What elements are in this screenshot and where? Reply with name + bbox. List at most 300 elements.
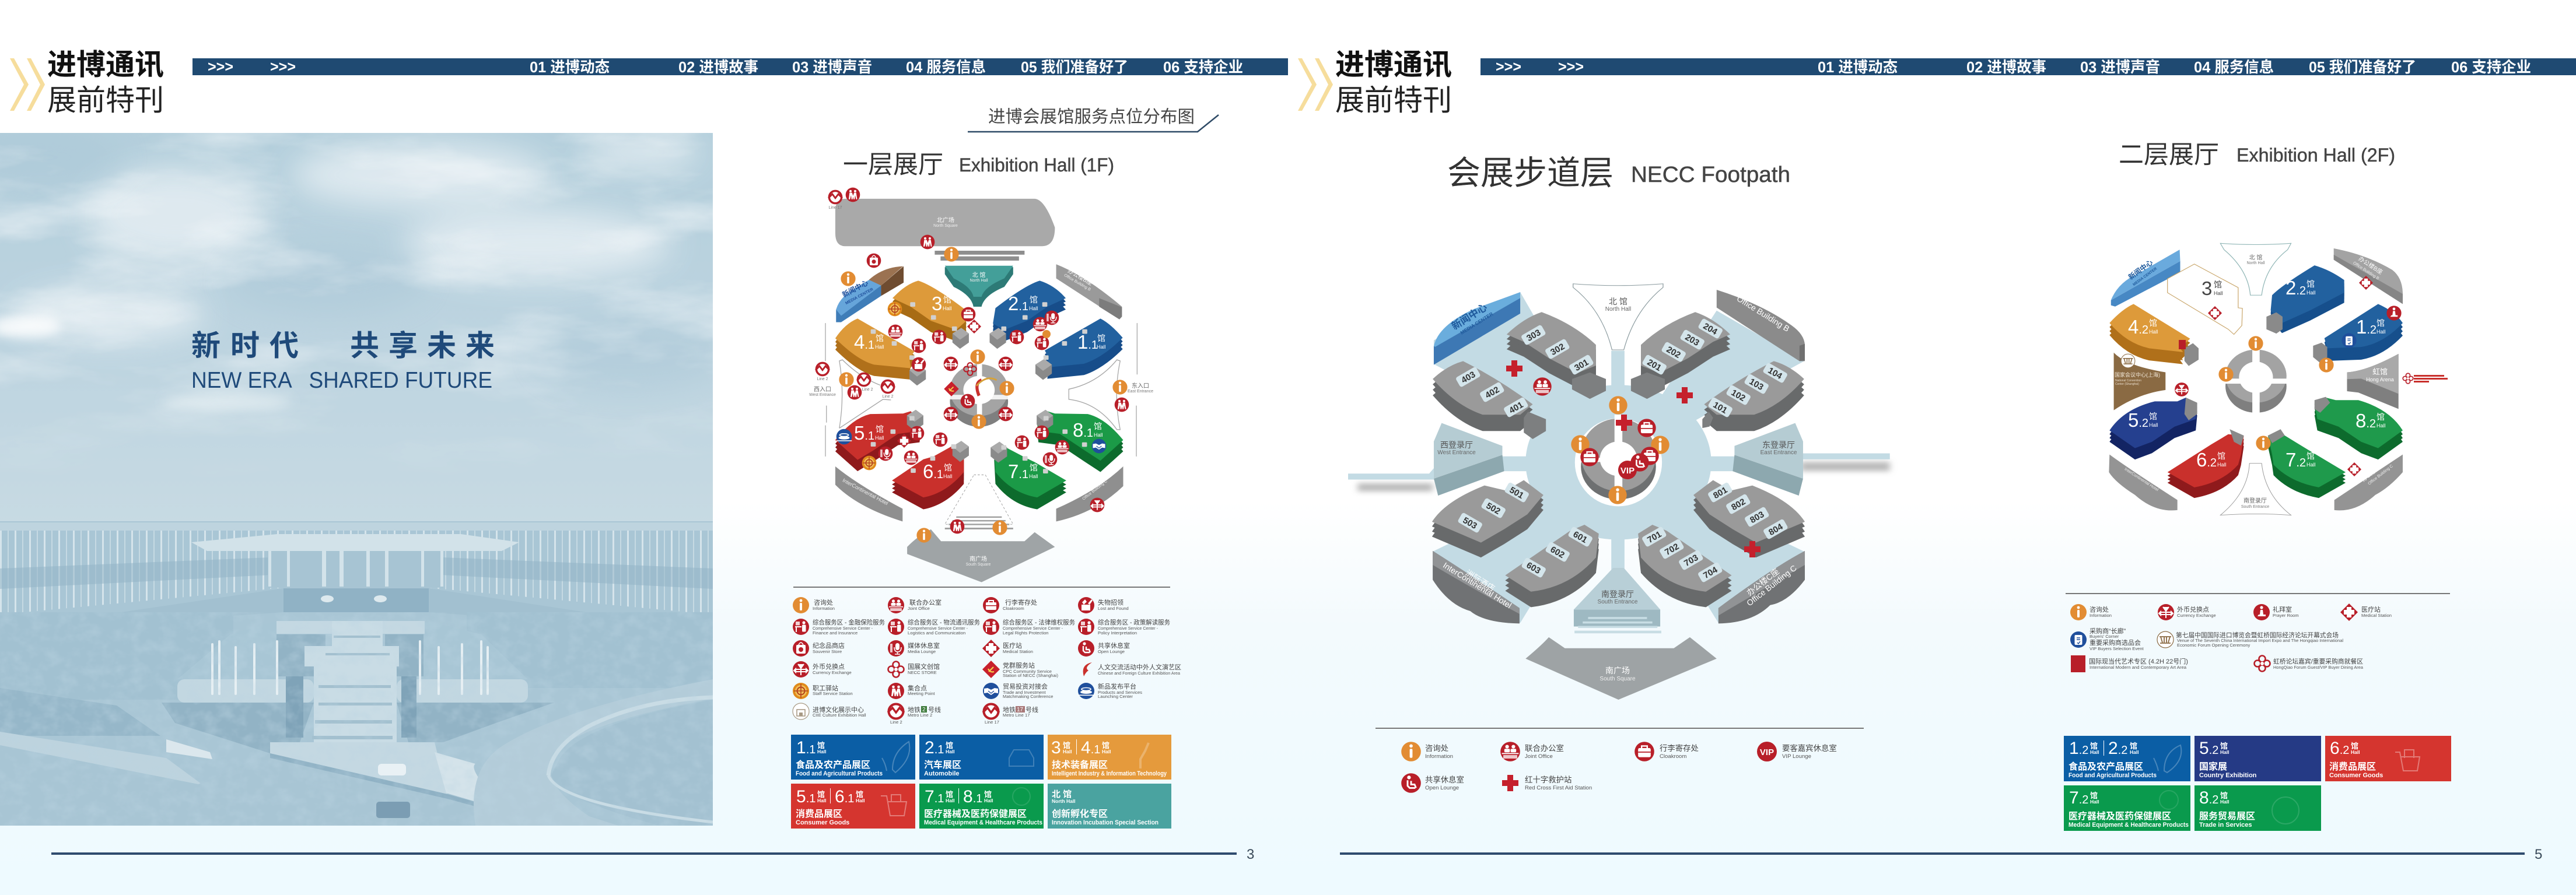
map labels: 1F places: Line 17 <box>829 206 842 210</box>
map labels: NECC room tags: 603 <box>1525 560 1542 576</box>
map labels: 2F hall numbers: 4.2 <box>2128 316 2148 338</box>
map labels: 1F places: 北广场 <box>937 216 954 224</box>
office building B <box>1717 290 1805 361</box>
legend row 4: CPC Community Service <box>1003 669 1052 674</box>
legend row: info, currency, prayer, medical: 外币兑换点 <box>2177 605 2209 613</box>
south steps and dashed forecourt <box>945 475 1013 529</box>
navigation bar: left page: 04 服务信息 <box>906 58 986 76</box>
legend row 6: 号线 <box>928 706 941 714</box>
legend row 3: Medical Station <box>1003 649 1033 654</box>
card: technology halls 3 and 4.1: Intelligent Industry & Information Technology <box>1052 770 1167 777</box>
legend row 1: Joint Office <box>908 606 930 611</box>
legend row 5: Matchmaking Conference <box>1003 694 1054 699</box>
north hall <box>945 266 1013 307</box>
legend row: art area and dining area: 虹桥论坛嘉宾/重要采购商就餐区 <box>2273 657 2363 665</box>
map labels: 2F hall numbers <box>2128 277 2386 471</box>
map labels: NECC places: 办公楼C座 <box>1745 566 1781 598</box>
card: medical halls 7.1 and 8.1: Hall <box>946 798 955 803</box>
map labels: 2F places: South Entrance <box>2241 505 2269 509</box>
card: medical halls 7.1 and 8.1: 馆 <box>984 790 992 799</box>
map labels: NECC room tags: 102 <box>1730 388 1747 403</box>
legend row 6: 进博文化展示中心 <box>813 706 864 714</box>
card: trade in services hall 8.2: 8.2 <box>2199 788 2218 808</box>
card: trade in services hall 8.2: 服务贸易展区 <box>2199 810 2255 822</box>
navigation bar: right page: 02 进博故事 <box>1966 58 2046 76</box>
card: medical hall 7.2: 医疗器械及医药保健展区 <box>2068 810 2171 822</box>
map labels: NECC room tags: 502 <box>1485 501 1502 517</box>
map labels: 1F hall numbers: 7.1 <box>1008 461 1028 482</box>
map labels: 2F hall numbers: 馆 <box>2214 280 2222 289</box>
legend row 5: 职工驿站 <box>813 684 838 692</box>
legend row 3: 纪念品商店 <box>813 641 845 650</box>
map labels: 2F places: 洲际酒店 <box>2132 462 2155 481</box>
office building C <box>1056 466 1123 521</box>
card: medical hall 7.2: 7.2 <box>2069 788 2088 808</box>
map labels: 1F hall numbers: 3 <box>932 293 942 314</box>
map labels: 1F hall numbers: 4.1 <box>854 331 874 353</box>
map labels: NECC room tags: 602 <box>1549 545 1566 560</box>
card: food halls 1.2 and 2.2 <box>2064 736 2190 781</box>
hall 3 <box>892 280 969 349</box>
legend row: art area and dining area: 国际现当代艺术专区 (4.2H 22号门) <box>2089 657 2188 665</box>
map labels: 1F places: Line 2 <box>882 395 894 399</box>
legend row 5: Trade and Investment <box>1003 690 1046 695</box>
legend row 1: 咨询处 <box>814 598 833 606</box>
legend row 4: NECC STORE <box>908 670 937 675</box>
legend item: information: 咨询处 <box>1425 744 1448 753</box>
legend row 5 <box>793 682 1142 699</box>
map labels: 1F places: Office Building B <box>1063 273 1091 292</box>
legend row: art area and dining area: International Modern and Contemporary Art Area <box>2090 665 2187 670</box>
navigation bar: left page: >>> <box>270 58 296 75</box>
map labels: NECC room tags <box>1455 318 1788 583</box>
map labels: 2F places: Hong Arena <box>2366 377 2394 382</box>
card: technology halls 3 and 4.1: Hall <box>1102 749 1111 754</box>
halls 701-704 <box>1638 525 1732 607</box>
map labels: 1F hall numbers: 馆 <box>943 295 951 304</box>
legend item: cloakroom: 行李寄存处 <box>1660 743 1699 753</box>
legend item: VIP lounge: VIP Lounge <box>1782 753 1811 760</box>
legend row: info, currency, prayer, medical: Medical Station <box>2361 613 2392 618</box>
map icons: NECC footpath service points <box>1506 360 1760 557</box>
card: country exhibition hall 5.2: Country Exhibition <box>2199 772 2257 779</box>
map labels: 2F hall numbers: 8.2 <box>2356 410 2376 431</box>
map labels: 1F places: West Entrance <box>809 393 836 397</box>
map labels: 1F hall numbers: 2.1 <box>1008 293 1028 314</box>
legend row 6: Line 17 <box>985 719 999 725</box>
card: innovation north hall: 创新孵化专区 <box>1052 808 1108 819</box>
navigation bar: right page <box>1480 58 2576 76</box>
legend item: open lounge: Open Lounge <box>1425 785 1459 791</box>
navigation bar: left page: 05 我们准备好了 <box>1021 58 1128 76</box>
map labels: 2F hall numbers: 馆 <box>2149 412 2157 421</box>
halls 601-603 <box>1505 525 1599 607</box>
card: consumer goods halls 5.1 and 6.1: 消费品展区 <box>796 809 842 819</box>
map labels: NECC places: 洲际酒店 <box>1464 568 1497 593</box>
media center <box>2111 250 2180 307</box>
map labels: 1F places: 北 馆 <box>972 271 985 279</box>
hall gate tags <box>871 302 1087 473</box>
hall 2.1 <box>990 280 1066 349</box>
map labels: 2F places: National Convention <box>2115 379 2141 382</box>
south square <box>907 529 1055 582</box>
card: automobile hall 2.1: 馆 <box>946 741 953 750</box>
map labels: NECC room tags: 503 <box>1461 515 1479 531</box>
map labels: NECC room tags: 101 <box>1712 400 1729 416</box>
legend item: VIP lounge <box>1757 742 1837 761</box>
map labels: NECC places: 东登录厅 <box>1762 440 1795 450</box>
slogan on photo: 新时代 <box>191 329 309 362</box>
hall 5.2 <box>2109 398 2197 459</box>
map labels: 1F hall numbers: 馆 <box>876 424 884 434</box>
halls 501-503 <box>1432 480 1544 557</box>
map labels: NECC places: 西登录厅 <box>1440 440 1473 450</box>
legend row 3: Media Lounge <box>908 649 936 654</box>
card: consumer goods hall 6.2: 6.2 <box>2330 739 2349 758</box>
legend row 6: Metro Line 2 <box>908 713 932 718</box>
legend row 6: 地铁 <box>908 706 921 714</box>
map labels: 1F places <box>809 206 1153 567</box>
card: food halls 1.2 and 2.2: 食品及农产品展区 <box>2068 761 2143 772</box>
map labels: NECC places: 南登录厅 <box>1601 589 1634 599</box>
map labels: NECC places: 北 馆 <box>1609 297 1628 306</box>
legend row 6: CIIE Culture Exhibition Hall <box>813 713 866 718</box>
map labels: 2F places: 办公楼B座 <box>2357 255 2384 276</box>
legend row 3: Souvenir Store <box>813 649 842 654</box>
card: consumer goods halls 5.1 and 6.1: 馆 <box>856 790 863 799</box>
map labels: NECC room tags: 801 <box>1712 485 1729 501</box>
map labels: 1F hall numbers: Hall <box>1094 432 1103 438</box>
card: technology halls 3 and 4.1: 3 <box>1051 738 1061 757</box>
legend item: joint office: Joint Office <box>1525 753 1553 760</box>
card: medical halls 7.1 and 8.1: Hall <box>984 798 993 803</box>
legend item: information: Information <box>1425 753 1453 760</box>
map icons: NECC footpath service points: VIP <box>1620 466 1634 476</box>
card: consumer goods hall 6.2: 馆 <box>2351 742 2358 750</box>
hall 7.1 <box>991 442 1066 510</box>
legend row 4: 外币兑换点 <box>813 662 845 671</box>
legend row: buyers corner and venue: Economic Forum Opening Ceremony <box>2177 643 2250 648</box>
legend item: red cross: 红十字救护站 <box>1525 775 1572 784</box>
card: food halls 1.2 and 2.2: 馆 <box>2130 742 2137 750</box>
navigation bar: left page: 02 进博故事 <box>678 58 758 76</box>
south entrance outline <box>2220 464 2291 515</box>
map labels: 2F hall numbers: 馆 <box>2306 451 2315 461</box>
map labels: 1F places: Office Building C <box>1082 479 1108 501</box>
card: food halls 1.2 and 2.2: Food and Agricultural Products <box>2068 772 2157 779</box>
card: medical hall 7.2: 馆 <box>2090 791 2098 800</box>
map labels: 1F hall numbers: 馆 <box>1094 422 1102 431</box>
map labels: 1F places: North Hall <box>970 279 988 283</box>
legend row: buyers corner and venue: Venue of The Seventh China International Import Expo and The Hongqiao International <box>2177 638 2343 643</box>
map labels: 2F places: Office Building C <box>2367 464 2394 486</box>
map labels: 2F places: Office Building B <box>2352 261 2380 281</box>
map labels: 2F hall numbers: 馆 <box>2376 318 2385 328</box>
slogan on photo: NEW ERA SHARED FUTURE <box>191 368 492 393</box>
map labels: 1F hall numbers: Hall <box>1029 473 1038 479</box>
map labels: 2F hall numbers: Hall <box>2376 423 2386 429</box>
navigation bar: right page: >>> <box>1558 58 1584 75</box>
map labels: 2F hall numbers: Hall <box>2149 329 2158 335</box>
card: automobile hall 2.1: 汽车展区 <box>924 759 961 770</box>
zone cards: 2F <box>2064 736 2451 831</box>
map labels: NECC room tags: 704 <box>1702 564 1720 581</box>
card: medical halls 7.1 and 8.1: 8.1 <box>963 787 982 806</box>
hall 6.2 <box>2168 429 2244 498</box>
west walkway with shadow <box>1348 468 1434 492</box>
card: consumer goods halls 5.1 and 6.1: Hall <box>817 798 827 803</box>
legend: NECC footpath <box>1376 728 1864 793</box>
map: NECC footpath shapes <box>1348 284 1890 700</box>
map labels: 1F hall numbers: 馆 <box>1030 295 1038 304</box>
hall 1.2 <box>2313 304 2403 363</box>
legend row: buyers corner and venue: 采购商“长廊” <box>2090 627 2126 635</box>
map labels: NECC places: 新闻中心 <box>1450 301 1489 332</box>
map labels: 2F hall numbers: 2.2 <box>2286 277 2306 299</box>
legend row 1: Information <box>813 606 835 611</box>
central rotunda <box>2224 348 2288 415</box>
legend row: buyers corner and venue: VIP Buyers Selection Event <box>2090 646 2144 651</box>
map labels: NECC places: South Entrance <box>1598 599 1638 605</box>
legend row 2: 综合服务区 - 法律维权服务 <box>1003 618 1075 626</box>
legend row: art area and dining area: HongQiao Forum Guest/VIP Buyer Dining Area <box>2273 665 2364 670</box>
map labels: 2F places <box>2115 254 2394 509</box>
map labels: 2F hall numbers: Hall <box>2306 462 2316 468</box>
map labels: 1F hall numbers: 馆 <box>876 334 884 343</box>
map labels: NECC places: InterContinental Hotel <box>1441 560 1513 610</box>
map labels: 2F places: 南登录厅 <box>2244 497 2267 504</box>
card: food halls 1.2 and 2.2: 2.2 <box>2108 739 2127 758</box>
card: technology halls 3 and 4.1 <box>1048 735 1171 780</box>
legend row: info, currency, prayer, medical: Prayer Room <box>2273 613 2299 618</box>
map labels: NECC room tags: 703 <box>1682 553 1700 568</box>
map labels: NECC room tags: 702 <box>1663 542 1681 557</box>
map labels: 1F places: 新闻中心 <box>841 278 870 299</box>
card: innovation north hall <box>1048 784 1171 829</box>
card: food halls 1.1: Hall <box>817 749 827 754</box>
map labels: NECC room tags: 204 <box>1702 321 1719 337</box>
hall 8.2 <box>2315 397 2403 459</box>
legend item: open lounge: 共享休息室 <box>1425 775 1464 784</box>
map labels: 1F places: Line 2 <box>862 388 873 392</box>
navigation bar: right page: 01 进博动态 <box>1818 58 1898 76</box>
legend row 1: Lost and Found <box>1098 606 1129 611</box>
map labels: NECC room tags: 302 <box>1549 342 1566 357</box>
legend row 2: Comprehensive Service Center - <box>1098 626 1158 631</box>
map icons: 2F service points <box>2121 276 2448 476</box>
legend row 2: Comprehensive Service Center - <box>1003 626 1063 631</box>
legend row 3: 医疗站 <box>1003 641 1022 650</box>
hall 3 outline <box>2168 264 2242 334</box>
navigation bar: right page: 03 进博声音 <box>2080 58 2160 76</box>
legend row 5: Meeting Point <box>908 691 935 696</box>
legend row 3 <box>793 640 1130 657</box>
card: consumer goods halls 5.1 and 6.1 <box>791 784 915 829</box>
map labels: 2F places: 北 馆 <box>2249 254 2262 261</box>
map labels: NECC room tags: 203 <box>1684 332 1701 348</box>
legend row 2: Logistics and Communication <box>908 630 965 636</box>
hotel <box>2109 454 2178 510</box>
heading: exhibition hall 1F: 一层展厅 <box>843 151 943 179</box>
legend row 4: 人文交流活动中外人文演艺区 <box>1098 663 1181 671</box>
card: automobile hall 2.1: 2.1 <box>925 738 944 757</box>
legend row 5: Products and Services <box>1098 690 1142 695</box>
heading: exhibition hall 1F <box>843 151 1114 179</box>
map labels: 2F hall numbers: 6.2 <box>2196 449 2217 471</box>
heading: NECC footpath: NECC Footpath <box>1631 163 1790 187</box>
legend row 5: Launching Center <box>1098 694 1133 699</box>
legend row: info, currency, prayer, medical <box>2070 603 2392 621</box>
map labels: 1F places: Line 2 <box>817 377 828 381</box>
south square <box>1525 637 1717 700</box>
card: technology halls 3 and 4.1: 4.1 <box>1081 738 1100 757</box>
map labels: 1F places: 办公楼C座 <box>1073 476 1100 499</box>
map labels: NECC room tags: 201 <box>1646 357 1663 373</box>
legend row 6: Line 2 <box>890 719 902 725</box>
map labels: NECC room tags: 403 <box>1460 370 1477 385</box>
card: consumer goods halls 5.1 and 6.1: 5.1 <box>796 787 816 806</box>
legend row 6 <box>793 703 1038 725</box>
map labels: NECC room tags: 601 <box>1572 529 1589 545</box>
map labels: 2F places: 新闻中心 <box>2127 258 2154 282</box>
hotel <box>835 466 902 521</box>
masthead: left page: 展前特刊 <box>47 84 164 117</box>
legend item: joint office <box>1500 742 1564 761</box>
map labels: NECC places: Office Building C <box>1745 563 1798 608</box>
photo panel: NECC exterior with slogan background <box>0 128 723 828</box>
legend row 5: 贸易投资对接会 <box>1003 682 1048 690</box>
map labels: 1F hall numbers: Hall <box>943 473 953 479</box>
navigation bar: left page: 03 进博声音 <box>792 58 872 76</box>
legend row 1: 失物招领 <box>1098 598 1124 606</box>
legend row: buyers corner and venue: Buyers' Corner <box>2090 634 2119 639</box>
map labels: 2F hall numbers: 馆 <box>2306 279 2315 289</box>
office building C <box>1718 551 1805 623</box>
map labels: NECC room tags: 402 <box>1483 385 1501 401</box>
map labels: 2F hall numbers: Hall <box>2376 329 2386 335</box>
map labels: 2F hall numbers: 5.2 <box>2128 409 2148 431</box>
card: medical halls 7.1 and 8.1 <box>919 784 1044 829</box>
navigation bar: right page: 04 服务信息 <box>2194 58 2274 76</box>
card: food halls 1.2 and 2.2: 1.2 <box>2069 739 2088 758</box>
map labels: 1F places: East Entrance <box>1128 389 1153 394</box>
legend row 1: 联合办公室 <box>909 598 942 606</box>
legend row 2: 综合服务区 - 金融保险服务 <box>813 618 885 626</box>
map labels: 1F hall numbers: 1.1 <box>1077 331 1098 353</box>
map labels: 1F places: 东入口 <box>1132 382 1149 389</box>
west entrance <box>1434 423 1504 496</box>
legend row 4: Station of NECC (Shanghai) <box>1003 673 1058 678</box>
map labels: 2F hall numbers: Hall <box>2149 422 2158 428</box>
legend row 2 <box>793 618 1170 636</box>
halls 401-403 <box>1433 361 1546 439</box>
card: medical halls 7.1 and 8.1: Medical Equipment & Healthcare Products <box>924 819 1042 826</box>
map labels: 2F hall numbers: 7.2 <box>2286 449 2306 471</box>
card: consumer goods halls 5.1 and 6.1: Hall <box>856 798 865 803</box>
map labels: NECC room tags: 301 <box>1573 357 1590 373</box>
navigation bar: left page: >>> <box>208 58 233 75</box>
inner court <box>1575 418 1662 506</box>
legend row 2: Legal Rights Protection <box>1003 630 1049 636</box>
legend row 2: 综合服务区 - 政策解读服务 <box>1098 618 1170 626</box>
card: technology halls 3 and 4.1: 馆 <box>1063 741 1070 750</box>
map: exhibition hall 2F shapes <box>2109 243 2403 515</box>
legend row 2: Policy Interpretation <box>1098 630 1137 636</box>
masthead: left page: 进博通讯 <box>47 48 164 81</box>
hall 1.1 <box>1035 318 1123 380</box>
map labels: 1F hall numbers: 8.1 <box>1073 419 1093 441</box>
card: food halls 1.2 and 2.2: Hall <box>2090 749 2099 755</box>
legend item: cloakroom <box>1634 742 1699 761</box>
heading: exhibition hall 2F: 二层展厅 <box>2119 141 2219 169</box>
halls 801-804 <box>1693 480 1805 557</box>
map labels: NECC room tags: 701 <box>1646 529 1663 545</box>
map labels: 1F hall numbers: Hall <box>1029 306 1038 311</box>
map labels: 2F hall numbers: Hall <box>2214 290 2223 296</box>
map labels: 2F hall numbers: 馆 <box>2217 451 2225 461</box>
card: medical hall 7.2: Medical Equipment & Healthcare Products <box>2068 822 2189 829</box>
map labels: 1F places: 派出所 <box>1103 285 1122 300</box>
hall 4.2 <box>2109 304 2199 366</box>
map labels: NECC places: Office Building B <box>1735 294 1791 334</box>
halls 101-104 <box>1702 361 1804 431</box>
card: medical hall 7.2 <box>2064 785 2190 831</box>
entrance outlines <box>825 323 1137 457</box>
card: food halls 1.1 <box>791 735 915 780</box>
legend row: buyers corner and venue: 重要采购商选品会 <box>2090 638 2141 647</box>
legend row 5: 集合点 <box>908 684 927 692</box>
map: exhibition hall 1F shapes <box>825 199 1137 582</box>
map labels: 2F places: 办公楼C座 <box>2360 461 2386 483</box>
south entrance <box>1574 568 1661 633</box>
map labels: 1F hall numbers <box>854 293 1106 482</box>
heading: exhibition hall 2F: Exhibition Hall (2F) <box>2236 145 2395 166</box>
map labels: NECC room tags: 104 <box>1766 366 1784 381</box>
legend: 2F <box>2066 594 2450 672</box>
legend item: VIP lounge: 要客嘉宾休息室 <box>1782 743 1837 753</box>
map labels: 1F places: 洲际酒店 <box>854 475 878 492</box>
card: medical halls 7.1 and 8.1: 医疗器械及医药保健展区 <box>924 808 1027 819</box>
map labels: 1F hall numbers: 5.1 <box>854 422 874 444</box>
legend row 6: 17 <box>1017 707 1024 713</box>
card: food halls 1.1: 食品及农产品展区 <box>796 759 870 770</box>
card: consumer goods halls 5.1 and 6.1: 馆 <box>817 790 825 799</box>
legend item: open lounge <box>1401 773 1464 793</box>
card: innovation north hall: Innovation Incubation Special Section <box>1052 819 1158 826</box>
card: country exhibition hall 5.2: 馆 <box>2220 742 2228 750</box>
legend row 2: Comprehensive Service Center - <box>813 626 873 631</box>
hall 5.1 <box>835 410 923 471</box>
map labels: NECC room tags: 202 <box>1665 345 1682 360</box>
walkway floor <box>1433 292 1804 623</box>
card: medical halls 7.1 and 8.1: 馆 <box>946 790 953 799</box>
map labels: 1F places: 西入口 <box>814 387 831 393</box>
legend row 4: Chinese and Foreign Culture Exhibition Area <box>1098 671 1181 676</box>
map labels: 1F hall numbers: 馆 <box>1097 334 1105 343</box>
legend row 1 <box>793 597 1129 613</box>
map labels: 1F hall numbers: 馆 <box>944 463 952 472</box>
card: consumer goods hall 6.2: Consumer Goods <box>2329 772 2383 779</box>
heading: exhibition hall 1F: Exhibition Hall (1F) <box>959 155 1114 176</box>
map labels: 1F places: 南广场 <box>970 555 987 563</box>
legend row 2: Comprehensive Service Center - <box>908 626 968 631</box>
card: automobile hall 2.1 <box>919 735 1044 780</box>
map labels: NECC places: 办公楼B座 <box>1754 294 1791 322</box>
legend row: info, currency, prayer, medical: Information <box>2090 613 2112 618</box>
card: consumer goods hall 6.2 <box>2325 736 2451 781</box>
section tag: service point map <box>968 107 1219 132</box>
heading: NECC footpath <box>1447 155 1790 192</box>
